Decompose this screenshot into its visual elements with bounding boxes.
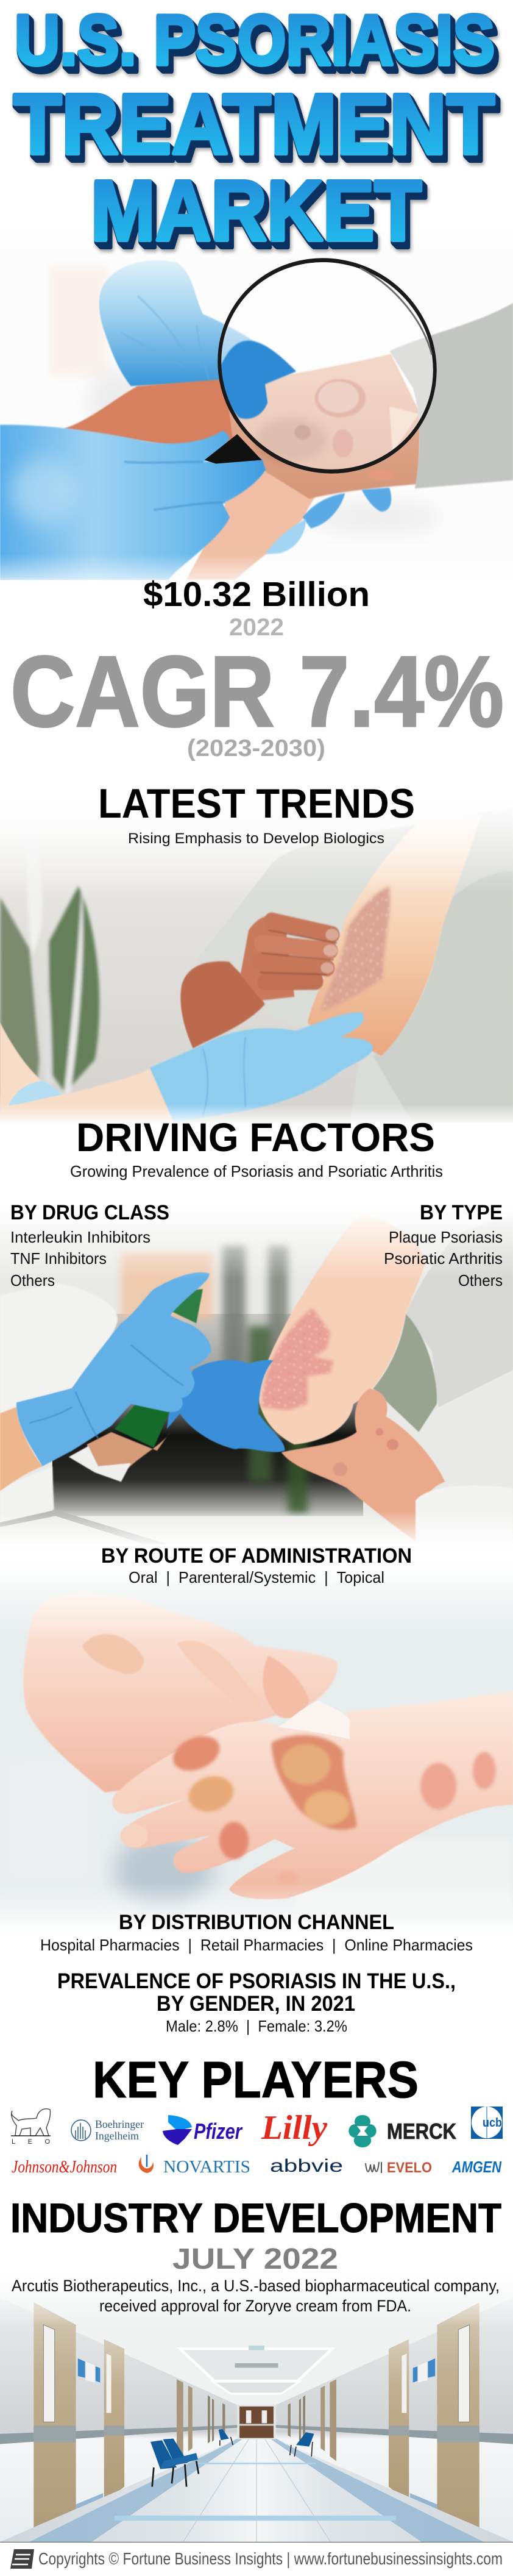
heading: BY ROUTE OF ADMINISTRATION <box>101 1544 412 1568</box>
lower supporting hand <box>281 1388 445 1541</box>
logo: Merck <box>348 2115 456 2147</box>
logo: UCB: ucb <box>483 2116 502 2130</box>
logo: Pfizer <box>163 2115 243 2145</box>
white coat left <box>0 1283 118 1522</box>
doctor arm skin <box>0 1407 170 1491</box>
item: Others <box>10 1271 55 1290</box>
segment: by type <box>384 1201 503 1290</box>
logo: Merck: MERCK <box>387 2119 456 2144</box>
glove <box>150 1012 373 1122</box>
development description <box>12 2277 500 2315</box>
prevalence by gender <box>57 1969 456 2035</box>
heading: BY TYPE <box>420 1201 503 1224</box>
upper glove <box>99 260 296 386</box>
spray bottle <box>115 1289 203 1447</box>
logo: Boehringer Ingelheim: Boehringer <box>95 2118 144 2130</box>
heading: latest trends: LATEST TRENDS <box>98 780 415 827</box>
item: Psoriatic Arthritis <box>384 1249 503 1268</box>
benches <box>150 2429 314 2487</box>
text: trend description: Rising Emphasis to Develop Biologics <box>128 830 384 847</box>
elbow arm with plaques <box>258 1215 425 1444</box>
blurred background <box>0 1246 425 1547</box>
front hand and fingers <box>112 1691 513 1899</box>
values: Male: 2.8% | Female: 3.2% <box>166 2017 347 2035</box>
sleeve cuff <box>8 1081 62 1106</box>
floor <box>0 2439 513 2542</box>
item: TNF Inhibitors <box>10 1249 107 1268</box>
heading: BY DRUG CLASS <box>10 1201 169 1224</box>
white coat right <box>416 1486 513 1547</box>
photo: patient scratching elbow <box>0 797 513 1126</box>
end of corridor door <box>238 2405 275 2439</box>
logo: Amgen: AMGEN <box>451 2158 502 2176</box>
back glove <box>167 1360 285 1452</box>
text: driving factor description: Growing Prevalence of Psoriasis and Psoriatic Arthritis <box>70 1162 443 1180</box>
right wall and doors <box>276 2297 513 2542</box>
company logos <box>11 2107 503 2177</box>
photo: hospital corridor <box>0 2272 513 2542</box>
logo: Lilly: Lilly <box>261 2109 328 2147</box>
item: Interleukin Inhibitors <box>10 1228 150 1246</box>
walls <box>0 2297 237 2542</box>
logo: Novartis: NOVARTIS <box>163 2158 250 2177</box>
heading: driving factors: DRIVING FACTORS <box>76 1115 435 1160</box>
heading: BY DISTRIBUTION CHANNEL <box>119 1911 394 1934</box>
logo: LEO: LEO <box>12 2138 50 2146</box>
photo: doctor inspecting arm with magnifier <box>0 229 513 579</box>
logo: Novartis <box>139 2155 250 2177</box>
segment: by route of administration <box>101 1544 412 1586</box>
market size value: $10.32 Billion <box>143 575 370 614</box>
icon: Fortune Business Insights logo <box>10 2549 34 2569</box>
logo: Johnson & Johnson: Johnson&Johnson <box>12 2158 117 2177</box>
item: Plaque Psoriasis <box>389 1228 503 1246</box>
psoriasis plaques <box>294 379 394 480</box>
plant leaves <box>0 816 99 1096</box>
item: Others <box>458 1271 503 1290</box>
logo: Boehringer Ingelheim: Ingelheim <box>95 2130 139 2142</box>
cream <box>278 1700 350 1739</box>
heading line 2: BY GENDER, IN 2021 <box>157 1992 355 2016</box>
CAGR period: (2023-2030) <box>187 735 325 762</box>
raised arm with plaques <box>308 816 481 1056</box>
line 2: received approval for Zoryve cream from FDA. <box>99 2297 411 2315</box>
items: Oral | Parenteral/Systemic | Topical <box>129 1568 384 1586</box>
patient's hand and forearm <box>64 354 420 579</box>
footer <box>0 2542 513 2576</box>
title <box>13 0 495 259</box>
large lower glove <box>0 425 266 579</box>
items: Hospital Pharmacies | Retail Pharmacies | Online Pharmacies <box>40 1936 473 1954</box>
logo: AbbVie: abbvie <box>270 2156 343 2176</box>
assistant arm <box>0 1022 174 1122</box>
title line 3: MARKET <box>91 162 422 259</box>
lower small glove pieces <box>265 488 391 554</box>
photo: cream on psoriatic hand <box>0 1562 513 1937</box>
segment: by distribution channel <box>40 1911 473 1954</box>
back hand <box>24 1593 338 1793</box>
sleeve grey-green <box>373 1215 513 1432</box>
heading line 1: PREVALENCE OF PSORIASIS IN THE U.S., <box>57 1969 456 1993</box>
logo: Evelo: EVELO <box>387 2160 432 2176</box>
market size year: 2022 <box>229 614 284 641</box>
shirt <box>196 808 513 1122</box>
logo: LEO <box>11 2109 51 2146</box>
sleeve <box>389 303 513 488</box>
front glove <box>16 1272 211 1466</box>
heading: key players: KEY PLAYERS <box>93 2051 419 2108</box>
scratching hand and forearm <box>180 915 339 1049</box>
photo: spray on elbow <box>0 1205 513 1549</box>
logo: Evelo <box>366 2160 432 2176</box>
segment: by drug class <box>10 1201 169 1290</box>
logo: Boehringer Ingelheim <box>71 2118 144 2142</box>
date: JULY 2022 <box>172 2243 338 2275</box>
ceiling lights <box>180 2346 332 2394</box>
magnifying glass <box>205 244 447 487</box>
logo: Pfizer: Pfizer <box>194 2119 243 2144</box>
logo: UCB <box>471 2107 503 2139</box>
plaques on hand <box>167 1730 496 1884</box>
